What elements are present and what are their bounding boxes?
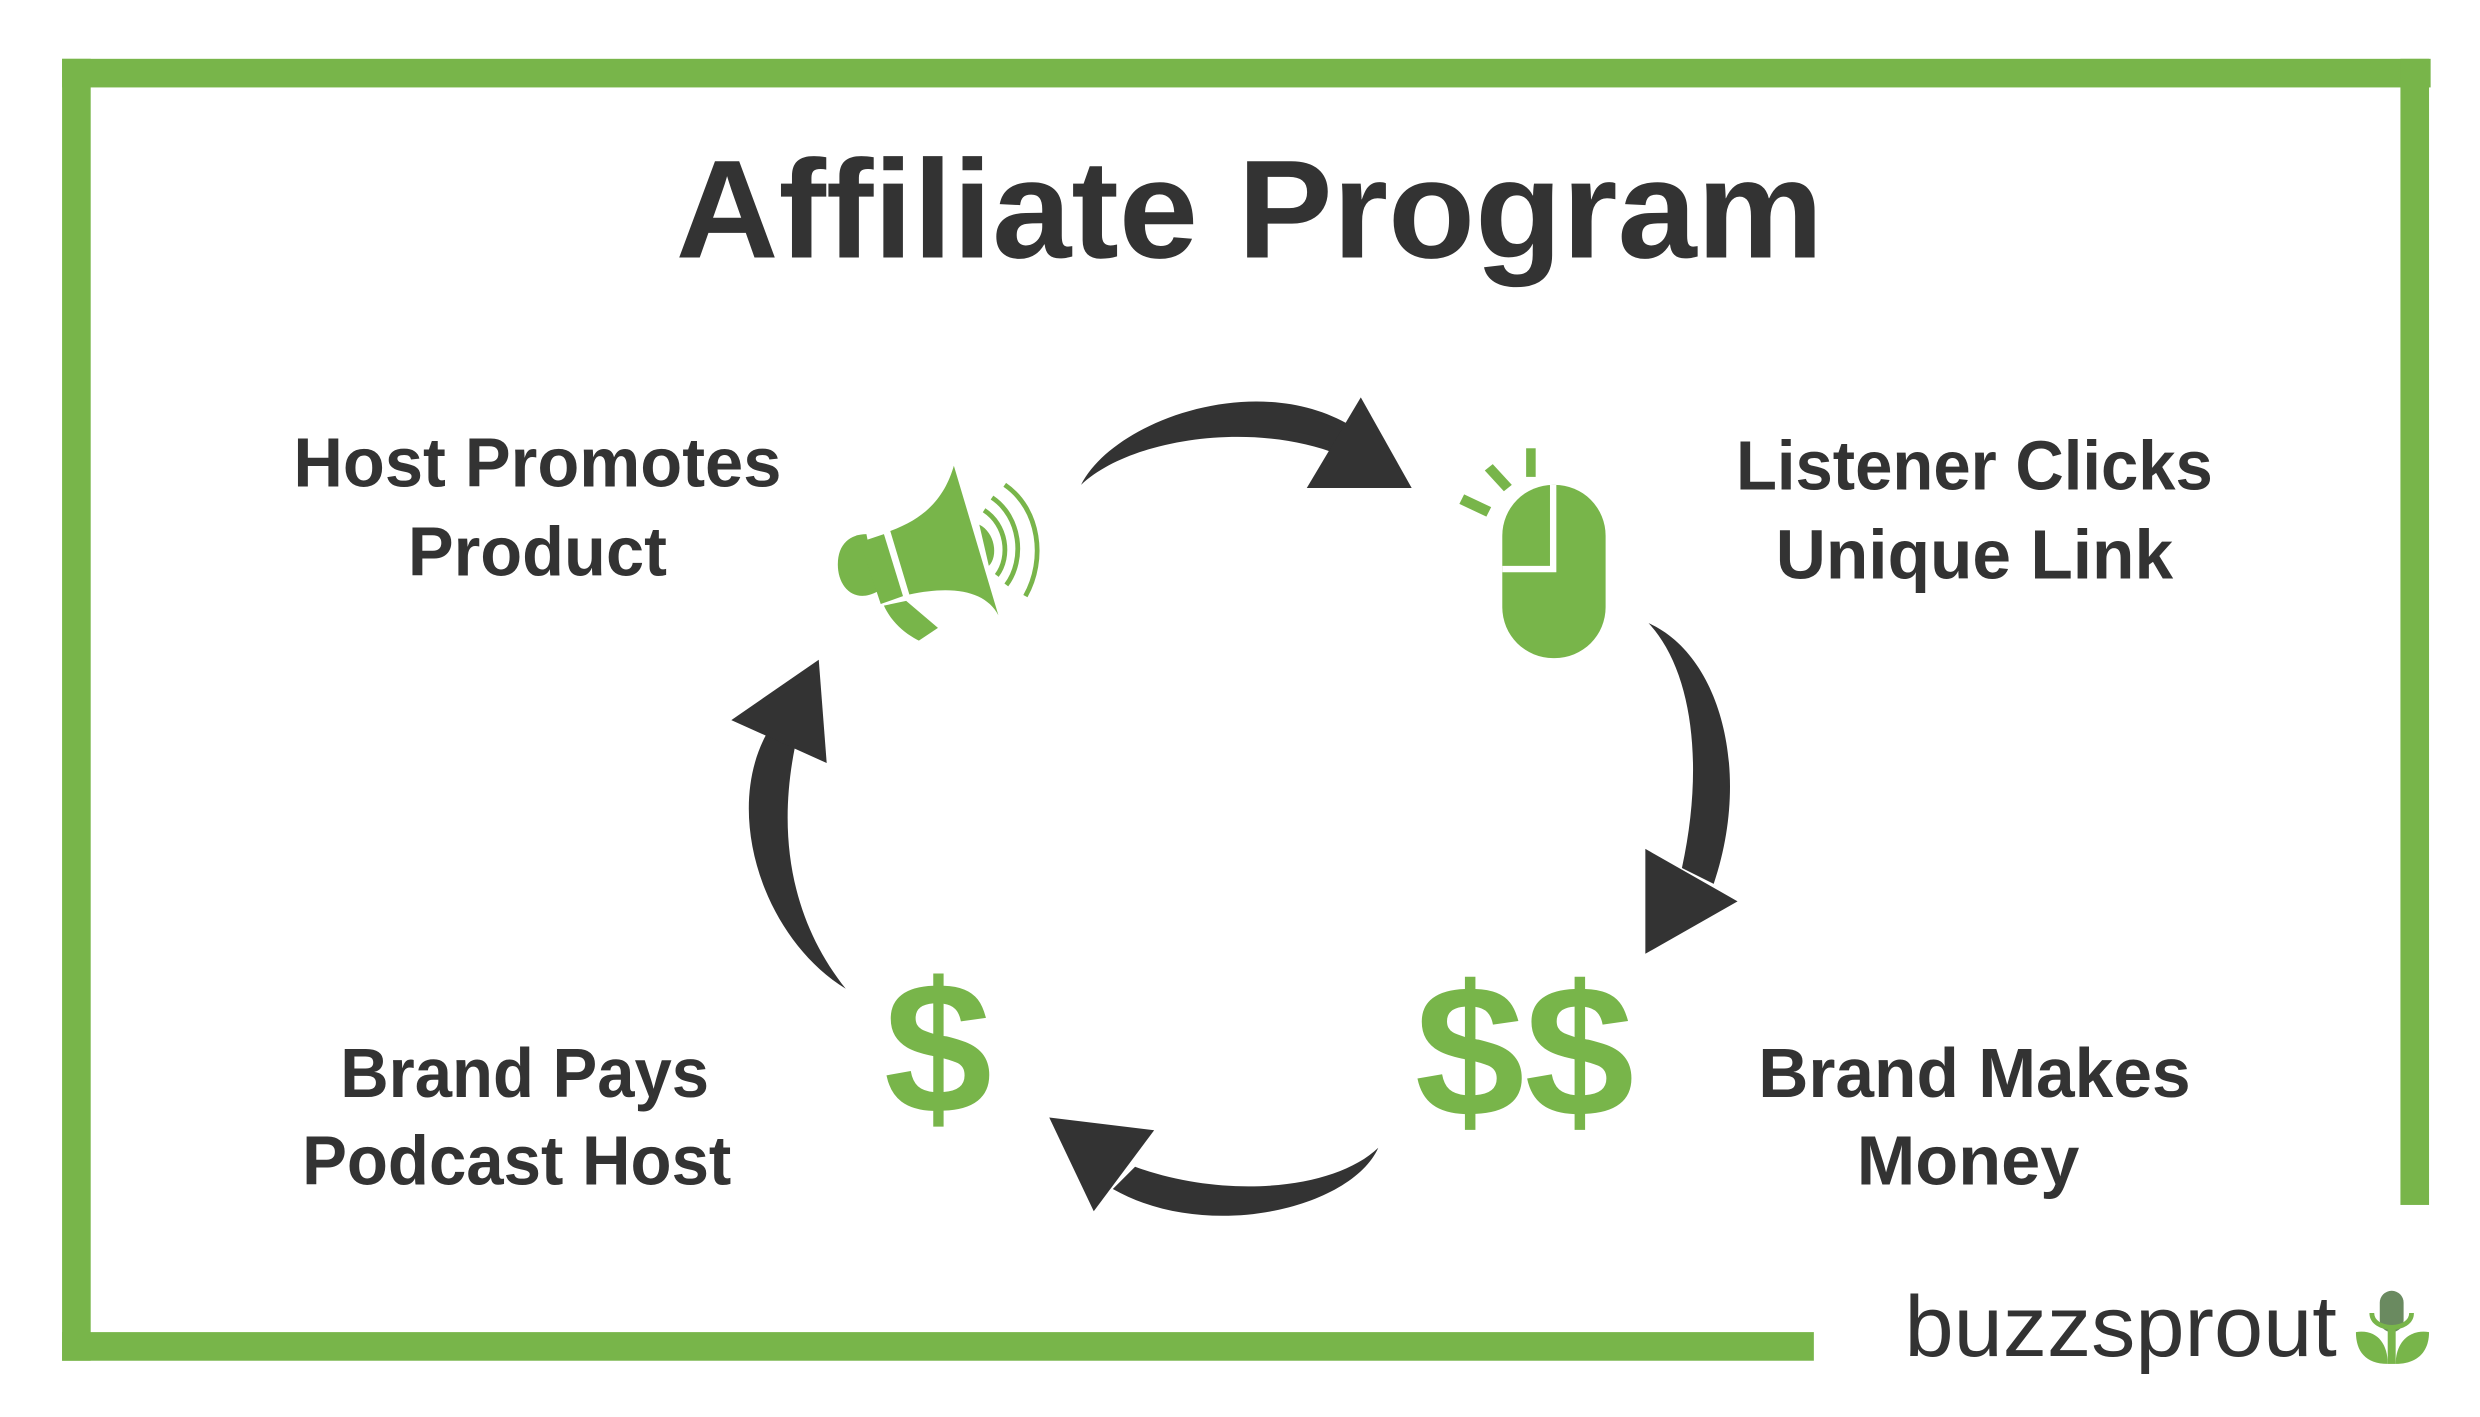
label: brand makes money [1758, 1034, 2191, 1199]
label: brand makes money: Money [1857, 1121, 2079, 1199]
title: Affiliate Program [676, 131, 1823, 288]
arrow: right [1645, 623, 1738, 954]
icon: megaphone [838, 466, 1037, 641]
label: brand makes money: Brand Makes [1758, 1034, 2191, 1112]
label: brand pays: Brand Pays [340, 1034, 709, 1112]
label: listener clicks: Listener Clicks [1736, 427, 2213, 505]
label: listener clicks: Unique Link [1776, 516, 2173, 594]
logo: buzzsprout: buzzsprout [1904, 1279, 2337, 1375]
arrow: left [731, 660, 846, 989]
label: brand pays: Podcast Host [302, 1121, 731, 1199]
label: host promotes [293, 423, 781, 590]
arrow: bottom [1049, 1118, 1378, 1216]
label: host promotes: Host Promotes [293, 423, 781, 501]
icon: mouse [1459, 448, 1606, 658]
arrow: top [1081, 397, 1412, 488]
icon: sprout mic [2356, 1291, 2429, 1364]
label: host promotes: Product [408, 512, 667, 590]
label: brand pays [302, 1034, 731, 1199]
icon: double dollar: $$ [1415, 946, 1634, 1156]
icon: single dollar: $ [884, 943, 992, 1153]
label: listener clicks [1736, 427, 2213, 594]
